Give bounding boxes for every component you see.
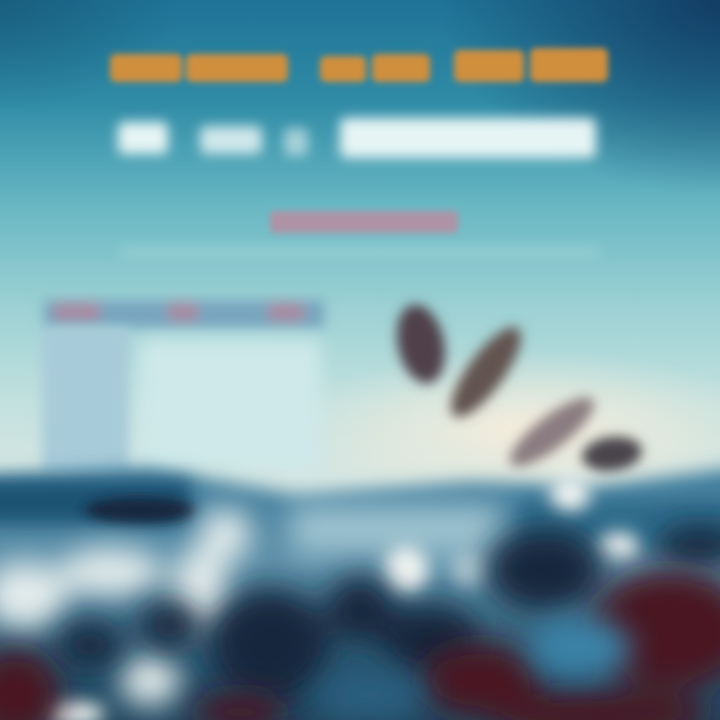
sea and rocks foreground bbox=[0, 466, 720, 720]
blue water patch bbox=[528, 618, 632, 678]
faint caption line bbox=[120, 246, 600, 258]
icon: upper feather shapes bbox=[390, 300, 532, 426]
teal lower water bbox=[314, 669, 426, 720]
table left column bbox=[42, 328, 130, 474]
heading: orange title bars bbox=[110, 48, 608, 82]
table body bbox=[140, 340, 320, 470]
heading: white subtitle bars bbox=[118, 118, 596, 158]
dark red rocks bbox=[0, 570, 720, 720]
pink label bar bbox=[270, 211, 458, 233]
table header band bbox=[44, 300, 324, 328]
white foam bbox=[0, 509, 251, 706]
table panel bbox=[42, 300, 324, 474]
bright foam highlights bbox=[45, 476, 640, 720]
icon: lower feather shapes bbox=[501, 387, 644, 477]
dark rocks bbox=[58, 525, 720, 701]
